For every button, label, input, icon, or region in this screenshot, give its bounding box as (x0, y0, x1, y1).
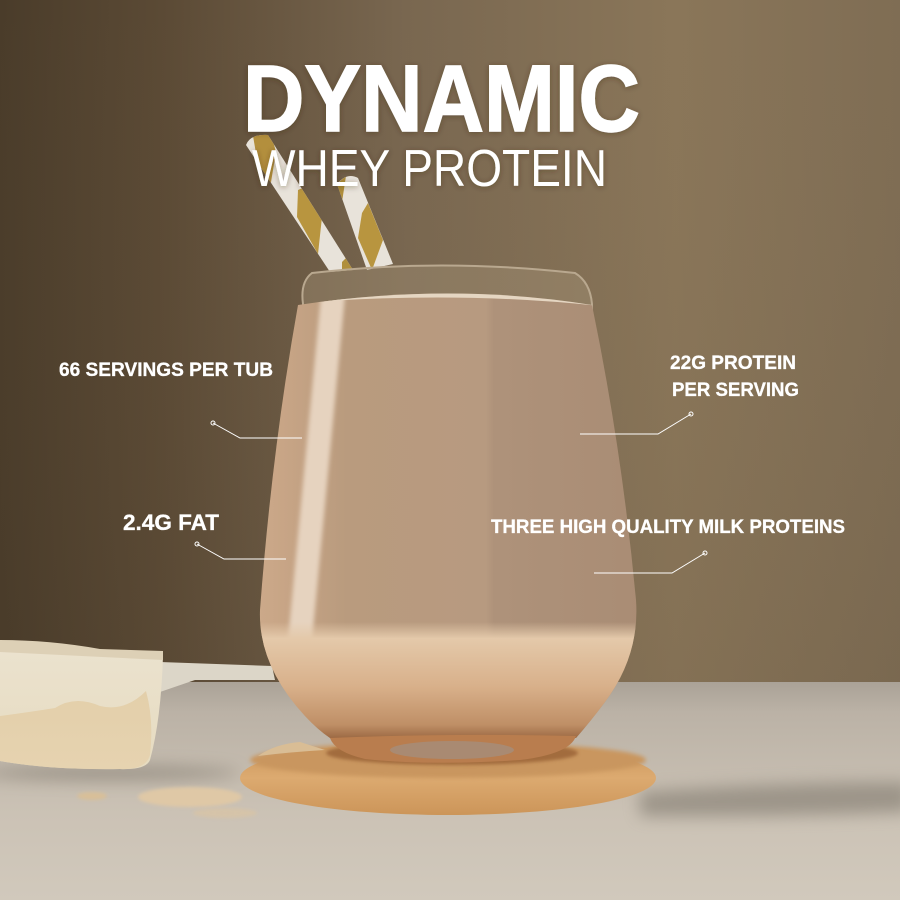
callout: protein: 22G PROTEIN (670, 352, 796, 374)
callout: 66 servings: 66 SERVINGS PER TUB (59, 359, 273, 381)
powder on coaster (258, 742, 325, 756)
title (243, 46, 640, 198)
scoop body (0, 650, 163, 769)
callout: 66 servings (59, 359, 302, 438)
glass of whey (250, 266, 650, 765)
callout: protein: PER SERVING (672, 379, 799, 401)
glass base (330, 735, 576, 763)
powder heap on top (0, 640, 163, 660)
straw: left (246, 134, 352, 272)
scoop handle (160, 662, 275, 692)
shadow under glass (326, 741, 578, 765)
shadow right of coaster (640, 782, 900, 816)
base opening (390, 741, 514, 759)
callout: fat: 2.4G FAT (123, 510, 220, 535)
callout: protein (580, 352, 799, 434)
straws (246, 134, 393, 272)
callout: milk proteins (491, 516, 845, 573)
background wall (0, 0, 900, 690)
table surface (0, 682, 900, 900)
milk (250, 280, 650, 740)
wooden coaster (240, 741, 656, 815)
title: dynamic: DYNAMIC (243, 46, 640, 152)
straw: right (338, 176, 393, 270)
coaster top surface (250, 742, 646, 778)
callout: fat (123, 510, 286, 559)
coaster body (240, 741, 656, 815)
powder visible through scoop (0, 691, 151, 769)
measuring scoop (0, 640, 163, 769)
scoop shadow (0, 766, 240, 780)
glass rim (302, 266, 592, 312)
title: whey protein: WHEY PROTEIN (252, 140, 607, 198)
spilled powder (77, 787, 257, 818)
callout: milk proteins: THREE HIGH QUALITY MILK PROTEINS (491, 516, 845, 538)
